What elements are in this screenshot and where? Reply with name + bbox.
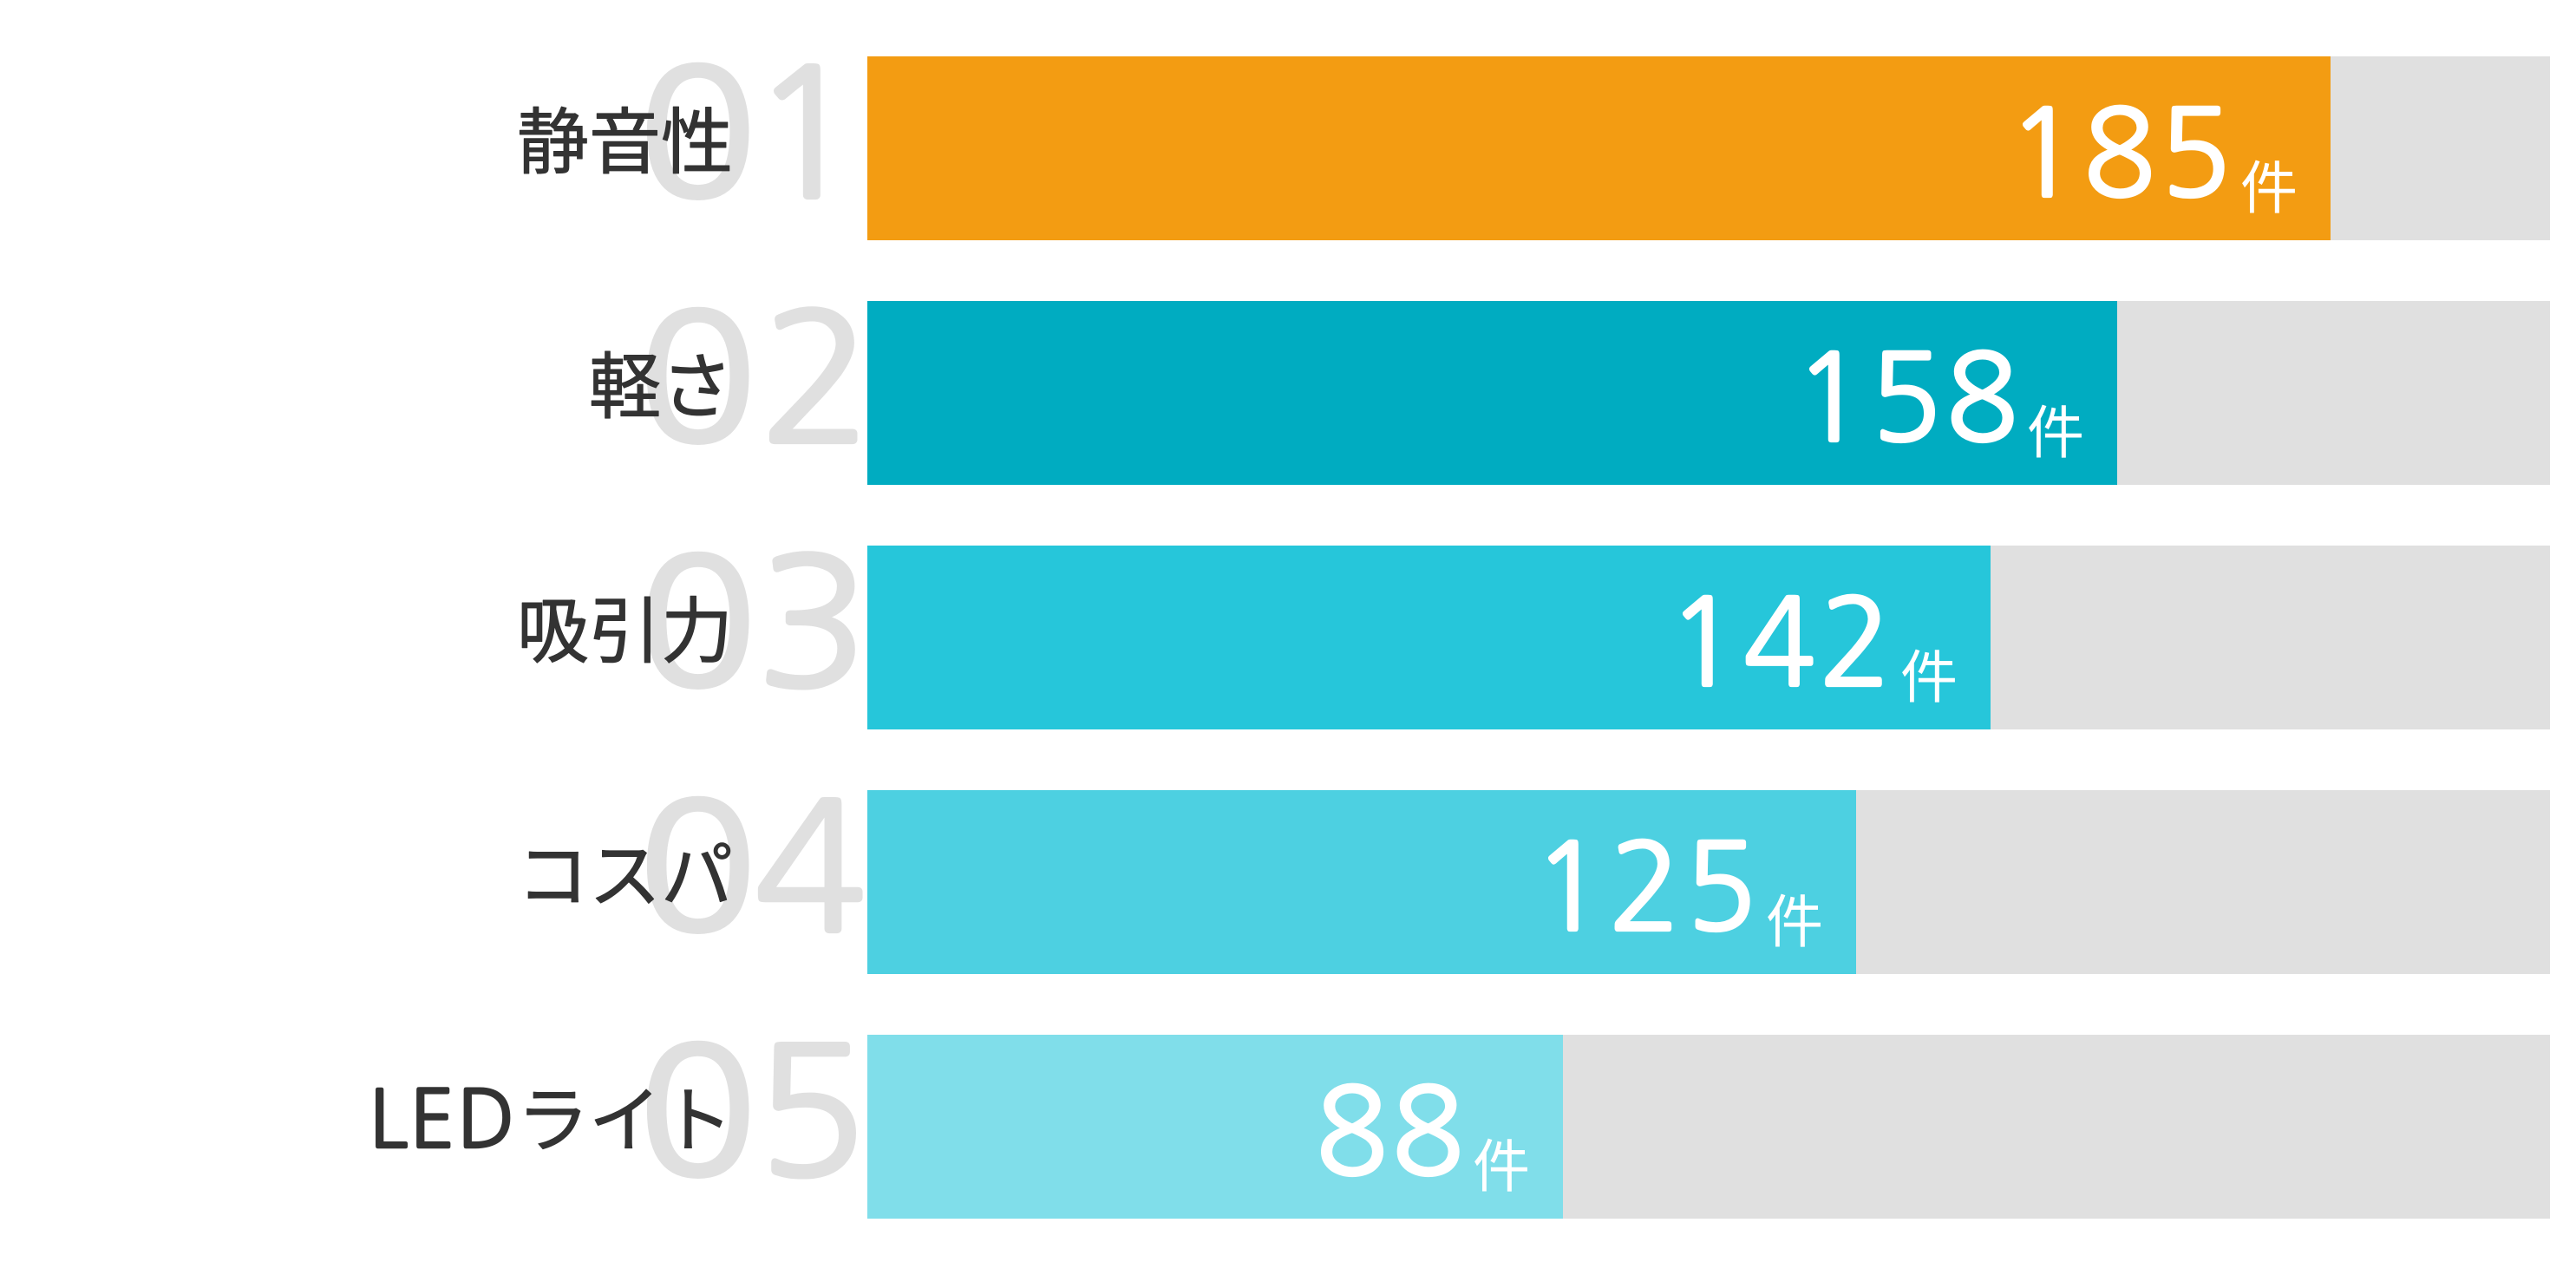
value 88: 88: [1316, 1072, 1468, 1192]
bar track: [867, 301, 2550, 485]
rank number 02: 2: [760, 291, 873, 468]
unit: 件: [1900, 631, 1958, 715]
rank number 03: 0: [637, 536, 757, 712]
value 185: 185: [2007, 94, 2235, 213]
bar track: [867, 56, 2550, 240]
unit: 件: [2240, 142, 2298, 226]
rank number 02: 0: [637, 291, 757, 468]
bar fill: [867, 546, 1991, 729]
rank number 04: 4: [754, 780, 866, 957]
rank number 04: [637, 780, 866, 957]
label: 静音性: 静音性: [517, 84, 733, 188]
bar fill: [867, 1035, 1563, 1219]
unit: 件: [1473, 1121, 1530, 1204]
rank number 05: 5: [755, 1024, 867, 1201]
rank number 01: 1: [749, 46, 862, 223]
value 125: 125: [1533, 827, 1761, 947]
unit: 件: [1766, 876, 1823, 959]
rank number 03: 3: [756, 535, 869, 712]
label: LEDライト: ライト: [517, 1062, 733, 1167]
label: コスパ: コスパ: [517, 818, 733, 922]
rank number 02: [637, 291, 873, 468]
row 2: 軽さ: [589, 291, 2550, 485]
bar fill: [867, 56, 2331, 240]
label: 吸引力: 吸引力: [517, 573, 733, 677]
rank number 01: [637, 46, 862, 223]
label: LEDライト: LED: [369, 1080, 517, 1160]
bar track: [867, 546, 2550, 729]
bar fill: [867, 301, 2117, 485]
label: 軽さ: 軽さ: [589, 329, 733, 433]
bar track: [867, 1035, 2550, 1219]
bar fill: [867, 790, 1856, 974]
rank number 05: 0: [637, 1025, 757, 1201]
rank number 03: [637, 535, 869, 712]
unit: 件: [2027, 387, 2084, 470]
row 1: 静音性: [517, 46, 2550, 240]
value 158: 158: [1794, 338, 2022, 458]
rank number 04: 0: [637, 781, 757, 957]
row 3: 吸引力: [517, 535, 2550, 729]
rank number 01: 0: [637, 47, 757, 223]
rank number 05: [637, 1024, 867, 1201]
row 5: LEDライト: [369, 1024, 2550, 1219]
bar track: [867, 790, 2550, 974]
value 142: 142: [1667, 583, 1895, 703]
row 4: コスパ: [517, 780, 2550, 974]
